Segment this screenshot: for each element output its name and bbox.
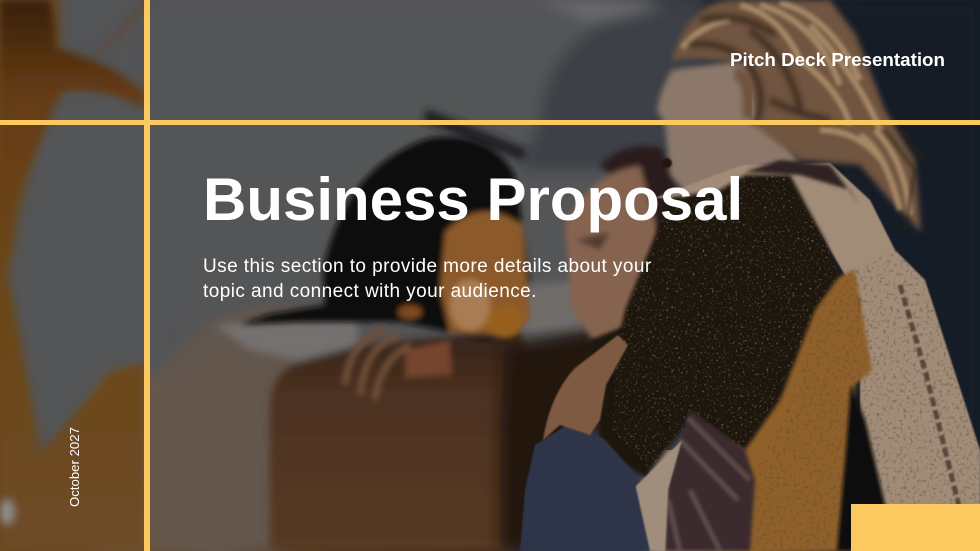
right woman: face and hair bbox=[657, 0, 925, 232]
description text: Use this section to provide more details about your bbox=[203, 256, 652, 277]
horizontal accent line bbox=[0, 120, 980, 125]
header label: Pitch Deck Presentation bbox=[730, 49, 945, 70]
yellow corner block bbox=[851, 504, 980, 551]
vertical accent line bbox=[144, 0, 150, 551]
date label: October 2027 bbox=[67, 427, 82, 507]
dark shadow between women bbox=[500, 330, 600, 551]
denim sleeve bbox=[520, 420, 650, 551]
description text: topic and connect with your audience. bbox=[203, 281, 537, 302]
hand bbox=[543, 335, 628, 440]
left woman: hair and face bbox=[240, 137, 530, 400]
description text bbox=[203, 256, 652, 302]
title: Business Proposal bbox=[203, 166, 743, 233]
right woman: knitted sweater and scarf bbox=[590, 160, 980, 551]
middle woman: hair and face bbox=[565, 146, 680, 350]
